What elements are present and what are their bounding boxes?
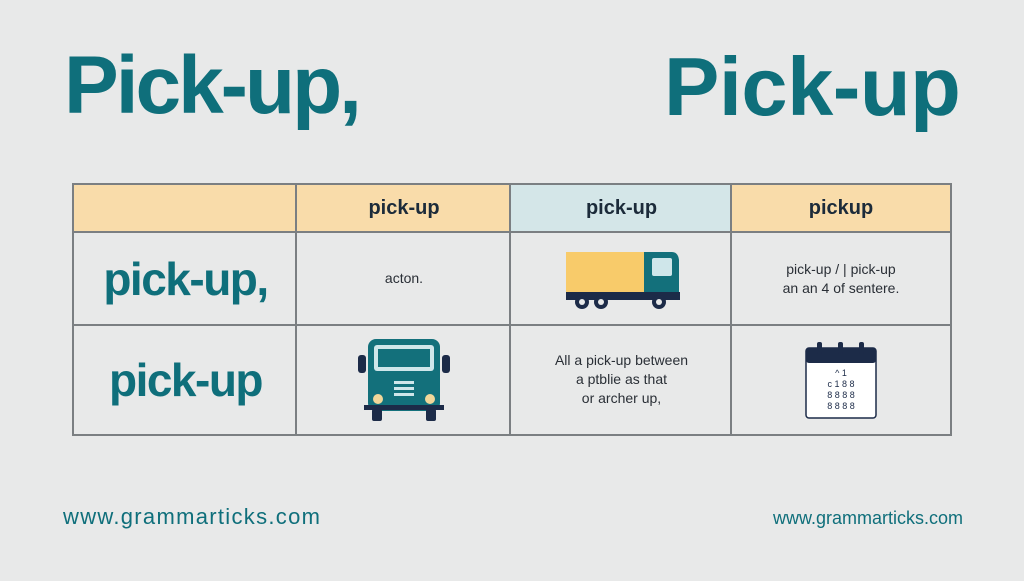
comparison table — [72, 183, 952, 436]
row 1 — [103, 252, 899, 309]
title right: Pick-up — [664, 40, 960, 133]
header row: pick-up — [586, 197, 657, 219]
header row — [74, 185, 950, 231]
icon: calendar — [805, 342, 877, 419]
row 1: pick-up / | pick-up — [786, 260, 896, 276]
header row: pick-up — [368, 197, 440, 219]
footer url left: www.grammarticks.com — [63, 504, 321, 529]
header row: pickup — [809, 197, 873, 219]
icon: delivery truck — [566, 252, 680, 309]
row 2: pick-up — [109, 354, 262, 406]
icon: calendar: 8 8 8 8 — [827, 390, 855, 400]
icon: calendar: 8 8 8 8 — [827, 400, 855, 410]
row 2 — [109, 339, 877, 421]
row 2: All a pick-up between — [555, 352, 688, 368]
row 1: an an 4 of sentere. — [783, 280, 899, 296]
grid lines — [295, 185, 297, 434]
footer url right: www.grammarticks.com — [773, 508, 963, 528]
title left: Pick-up, — [64, 40, 359, 131]
row 1: acton. — [385, 270, 423, 286]
icon: calendar: c 1 8 8 — [827, 378, 855, 388]
row 1: pick-up, — [103, 252, 268, 304]
icon: bus front — [358, 339, 450, 421]
icon: calendar: ^ 1 — [835, 368, 847, 378]
row 2: a ptblie as that — [576, 371, 667, 387]
row 2: or archer up, — [582, 390, 661, 406]
